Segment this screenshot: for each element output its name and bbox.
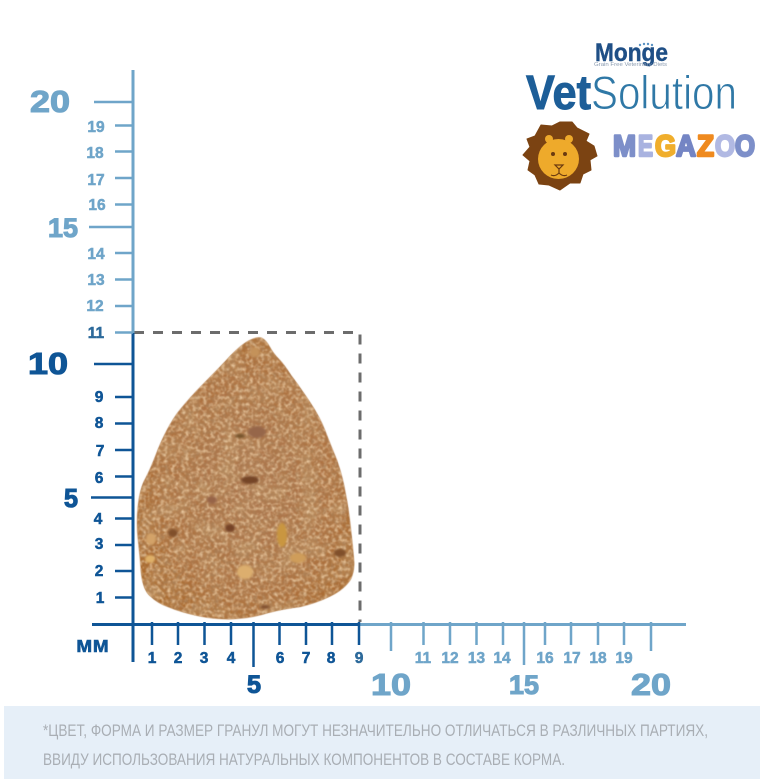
labels 11 to 20: 14	[87, 246, 105, 263]
labels 1 to 10: 4	[94, 511, 103, 528]
labels 11 to 20: 18	[86, 145, 104, 162]
footnote line 2: ВВИДУ ИСПОЛЬЗОВАНИЯ НАТУРАЛЬНЫХ КОМПОНЕНТОВ В СОСТАВЕ КОРМА.	[43, 750, 565, 769]
labels 1 to 10: 8	[95, 415, 104, 432]
labels 1 to 8: 4	[227, 650, 236, 667]
labels 1 to 8: 1	[148, 650, 157, 667]
ticks 10 to 20	[391, 622, 651, 665]
unit label: мм	[76, 632, 109, 657]
eyes	[551, 152, 555, 156]
axis line: dark section	[132, 333, 134, 662]
Monge paw	[639, 43, 653, 46]
Vet: Vet	[526, 67, 591, 120]
Monge wordmark: Monge	[595, 39, 668, 67]
axis line: light section	[132, 70, 134, 333]
ticks 1 to 10	[91, 364, 133, 598]
labels 11 to 20	[30, 84, 106, 342]
labels 1 to 8: 7	[302, 650, 310, 667]
labels 11 to 20: 17	[87, 172, 105, 189]
O: O	[715, 130, 735, 163]
labels 11 to 20: 16	[88, 197, 106, 214]
ticks 11 to 20	[89, 102, 133, 332]
footnote panel	[4, 706, 760, 779]
labels 11 to 20: 15	[48, 213, 78, 243]
labels 1 to 10: 7	[96, 443, 104, 460]
Z: Z	[697, 130, 714, 163]
A: A	[676, 130, 696, 163]
labels 11 to 20: 12	[86, 298, 104, 315]
labels 9 to 20: 18	[589, 650, 607, 667]
labels 1 to 8: 2	[174, 650, 182, 667]
labels 9 to 20: 11	[415, 650, 432, 667]
labels 9 to 20: 20	[631, 667, 671, 702]
icon: lion	[523, 122, 597, 190]
labels 1 to 10: 1	[96, 590, 105, 607]
labels 11 to 20: 19	[87, 119, 105, 136]
logo: VetSolution	[526, 66, 737, 120]
logo: MEGAZOO	[613, 130, 755, 163]
face	[538, 139, 579, 179]
labels 1 to 10: 10	[28, 346, 68, 381]
mane	[523, 122, 597, 190]
labels 1 to 8: 6	[276, 650, 285, 667]
labels 1 to 8	[148, 650, 336, 699]
labels 1 to 10: 2	[95, 563, 103, 580]
O: O	[735, 130, 755, 163]
labels 9 to 20	[355, 650, 671, 702]
labels 9 to 20: 14	[493, 650, 511, 667]
horizontal axis	[76, 622, 686, 702]
axis line: dark section	[92, 623, 360, 626]
axis line: light section	[360, 623, 686, 626]
labels 1 to 10: 5	[64, 483, 78, 513]
G: G	[655, 130, 676, 163]
labels 11 to 20: 11	[88, 325, 105, 342]
labels 11 to 20: 13	[87, 272, 105, 289]
labels 1 to 10: 9	[95, 389, 104, 406]
labels 9 to 20: 16	[536, 650, 554, 667]
labels 1 to 8: 5	[247, 671, 261, 699]
labels 9 to 20: 10	[371, 667, 411, 702]
labels 9 to 20: 12	[441, 650, 459, 667]
labels 1 to 8: 8	[327, 650, 336, 667]
labels 9 to 20: 17	[563, 650, 581, 667]
vertical axis	[28, 70, 134, 662]
M: M	[613, 130, 636, 163]
labels 1 to 10: 6	[95, 470, 104, 487]
labels 9 to 20: 13	[468, 650, 485, 667]
ears	[545, 135, 553, 143]
E: E	[638, 130, 653, 163]
nose and mouth	[551, 165, 567, 176]
kibble photo	[137, 337, 354, 619]
labels 9 to 20: 15	[509, 670, 539, 700]
ticks 1 to 9	[152, 622, 359, 667]
Monge tagline: Grain Free Veterinary Diets	[594, 62, 667, 68]
panel background	[4, 706, 760, 779]
logo: Monge	[594, 39, 668, 68]
labels 1 to 10	[28, 346, 105, 607]
labels 11 to 20: 20	[30, 84, 70, 119]
labels 9 to 20: 9	[355, 650, 364, 667]
Solution: Solution	[591, 66, 737, 119]
labels 9 to 20: 19	[615, 650, 633, 667]
labels 1 to 8: 3	[200, 650, 209, 667]
dashed size guide	[134, 332, 360, 622]
labels 1 to 10: 3	[95, 536, 104, 553]
